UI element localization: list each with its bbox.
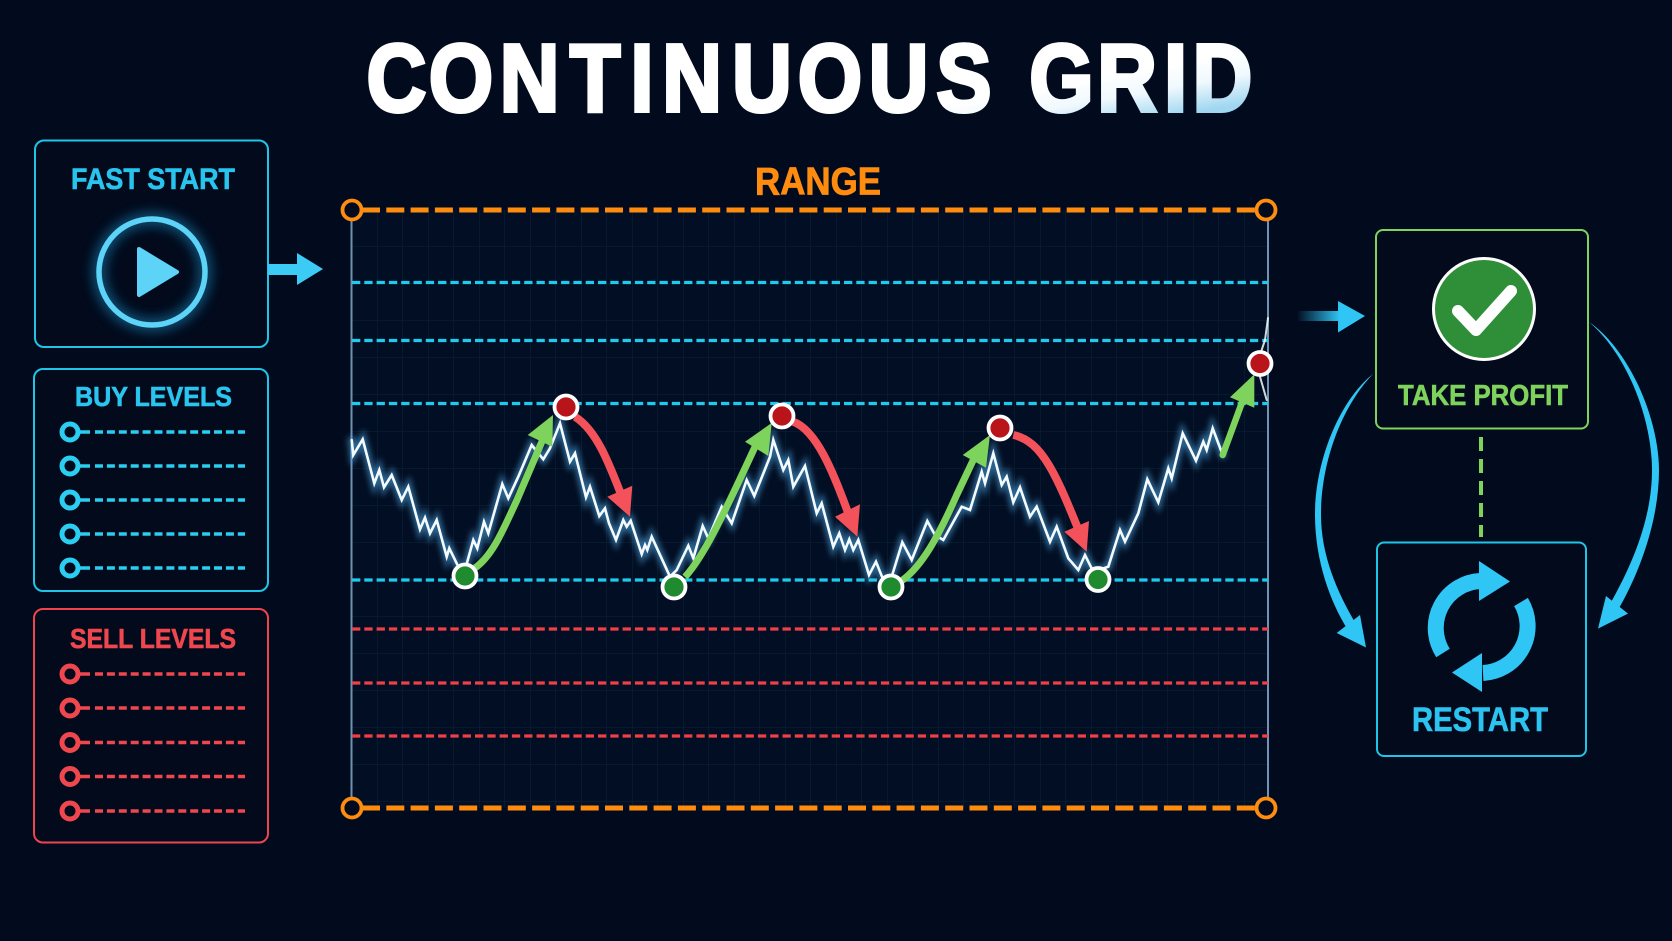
sell level rows: [62, 666, 245, 819]
range boundaries: [342, 200, 1276, 818]
panel: restart: [1377, 542, 1586, 756]
panel: sell levels: [34, 609, 268, 842]
heading: restart: RESTART: [1412, 701, 1548, 739]
heading: take profit: TAKE PROFIT: [1398, 380, 1569, 412]
red down arrows: [575, 417, 1089, 552]
panel: buy levels: [34, 369, 268, 591]
panel: take profit: [1376, 230, 1588, 428]
arrow: take profit loop left: [1315, 374, 1373, 648]
green up arrows: [475, 374, 1254, 581]
arrow: take profit loop right: [1589, 322, 1659, 629]
icon: restart cycle: [1436, 561, 1528, 692]
chart: continuous grid price chart: [342, 200, 1276, 818]
green entry nodes: [454, 564, 1110, 598]
arrow: chart to take profit: [1297, 301, 1365, 332]
price line: [352, 318, 1268, 580]
buy grid lines: [352, 282, 1268, 580]
red exit nodes: [554, 352, 1272, 440]
title: CONTINUOUS GRID: [367, 24, 1252, 131]
arrow: fast start to chart: [268, 253, 323, 285]
buy level rows: [62, 424, 245, 576]
icon: play button: [99, 219, 205, 325]
panel: fast start: [35, 140, 268, 347]
heading: range: RANGE: [755, 160, 881, 204]
heading: buy levels: BUY LEVELS: [75, 381, 232, 412]
sell grid lines: [352, 629, 1268, 736]
icon: check mark: [1434, 258, 1534, 360]
heading: fast start: FAST START: [71, 163, 235, 196]
heading: sell levels: SELL LEVELS: [70, 623, 236, 654]
connector: take profit to restart: [1479, 437, 1483, 537]
